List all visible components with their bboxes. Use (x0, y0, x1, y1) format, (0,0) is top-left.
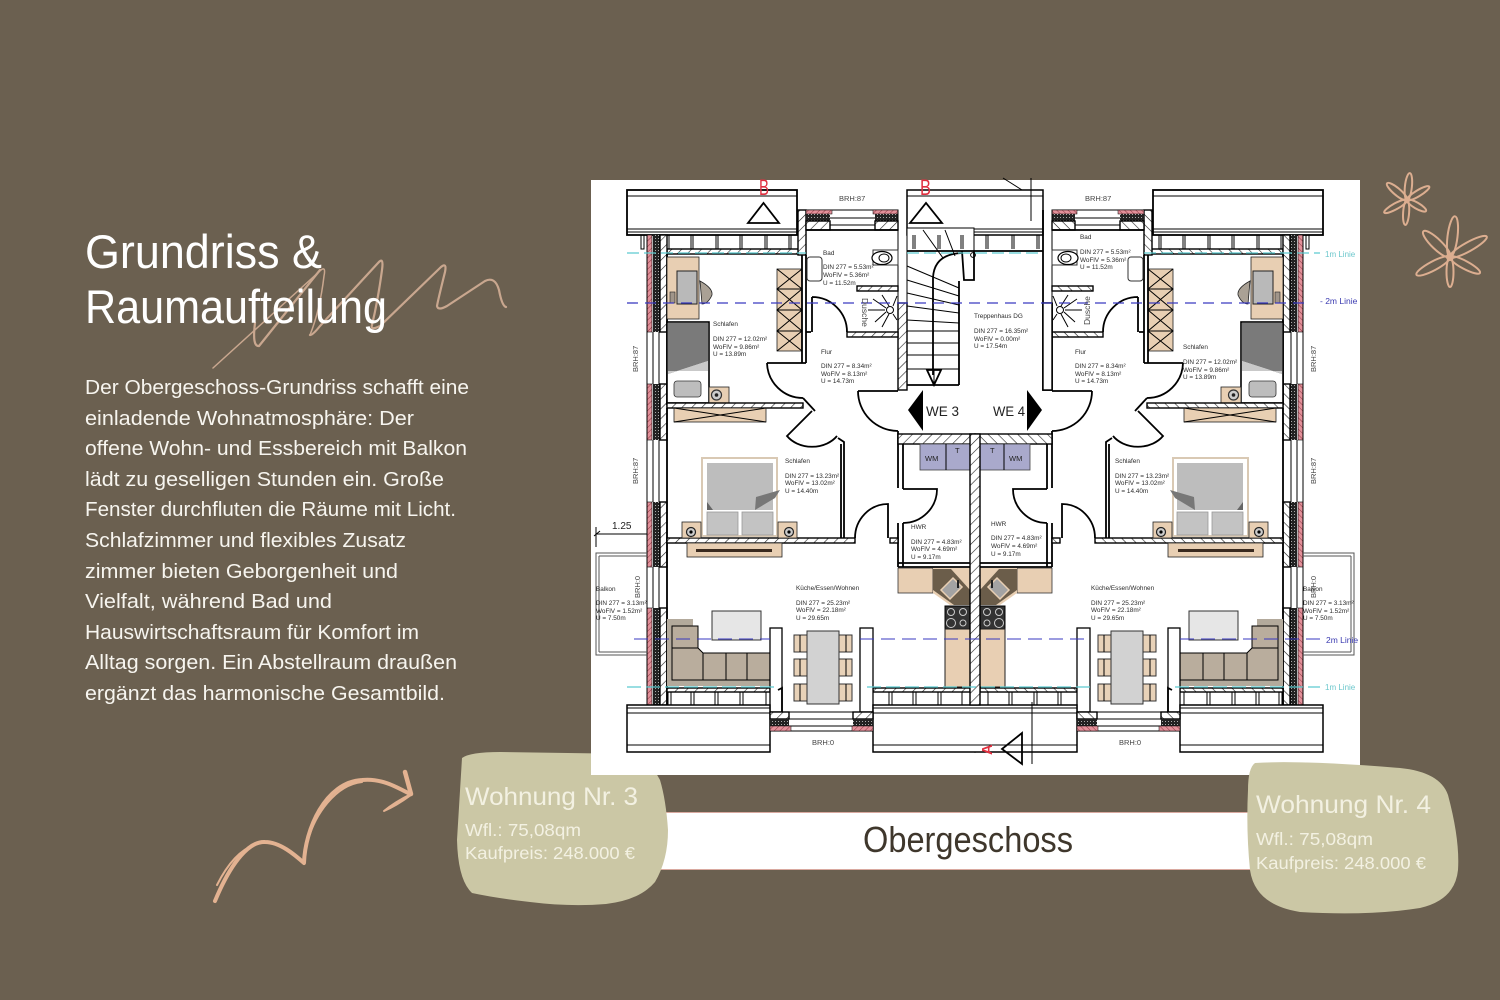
plan annotations: Schlafen (713, 321, 738, 328)
title: Grundriss & (85, 225, 322, 278)
level lines (627, 253, 1322, 687)
icon: hand-drawn arrow (215, 772, 411, 901)
plan annotations: WoFlV = 22.18m² (1091, 607, 1141, 614)
plan annotations: - 2m Linie (1320, 296, 1358, 306)
plan annotations: BRH:87 (631, 458, 640, 484)
plan annotations: U = 7.50m (1303, 615, 1333, 622)
decorative scribble behind title (213, 261, 506, 368)
plan annotations: WoFlV = 8.13m² (821, 371, 867, 378)
plan annotations: DIN 277 = 12.02m² (1183, 359, 1237, 366)
plan annotations: Dusche (1082, 296, 1092, 325)
plan annotations: U = 9.17m (991, 551, 1021, 558)
plan annotations: HWR (991, 521, 1007, 528)
plan annotations: 1m Linie (1325, 683, 1356, 692)
body text: Alltag sorgen. Ein Abstellraum draußen (85, 652, 457, 674)
plan annotations: Balkon (596, 586, 616, 593)
plan annotations: WE 4 (993, 403, 1025, 419)
plan annotations: BRH:87 (631, 346, 640, 372)
plan annotations: WoFlV = 0.00m² (974, 336, 1020, 343)
plan annotations: WoFlV = 13.02m² (785, 480, 835, 487)
icon: small flower (1383, 173, 1431, 225)
callout: Wohnung Nr. 4: Kaufpreis: 248.000 € (1256, 853, 1426, 873)
plan annotations: 1m Linie (1325, 250, 1356, 259)
plan annotations: WoFlV = 22.18m² (796, 607, 846, 614)
plan annotations: Treppenhaus DG (974, 313, 1023, 320)
plan annotations: BRH:0 (633, 576, 642, 598)
plan annotations: T (990, 446, 995, 455)
plan annotations: WoFlV = 4.69m² (991, 543, 1037, 550)
plan annotations: HWR (911, 524, 927, 531)
callout: Wohnung Nr. 4: Wohnung Nr. 4 (1256, 791, 1431, 819)
body text: Der Obergeschoss-Grundriss schafft eine (85, 377, 469, 399)
plan annotations (596, 194, 1358, 747)
plan annotations: DIN 277 = 4.83m² (911, 539, 962, 546)
plan annotations: WoFlV = 8.13m² (1075, 371, 1121, 378)
body text: Vielfalt, während Bad und (85, 591, 332, 613)
plan annotations: Schlafen (1183, 344, 1208, 351)
plan annotations: U = 17.54m (974, 343, 1007, 350)
body text: Hauswirtschaftsraum für Komfort im (85, 622, 419, 644)
plan annotations: DIN 277 = 25.23m² (796, 600, 850, 607)
plan annotations: DIN 277 = 5.53m² (1080, 249, 1131, 256)
callout: Wohnung Nr. 4: Wfl.: 75,08qm (1256, 829, 1373, 849)
body text: einladende Wohnatmosphäre: Der (85, 408, 414, 430)
panel: left blob backing (457, 752, 668, 905)
red section markers: B (920, 175, 931, 200)
plan annotations: DIN 277 = 3.13m² (1303, 600, 1354, 607)
red section markers: B (759, 175, 769, 200)
red section markers: A (979, 744, 996, 755)
plan annotations: T (955, 446, 960, 455)
body text: Schlafzimmer und flexibles Zusatz (85, 530, 406, 552)
plan annotations: BRH:0 (812, 738, 834, 747)
banner: Obergeschoss (655, 812, 1255, 870)
body text: ergänzt das harmonische Gesamtbild. (85, 683, 445, 705)
title: Raumaufteilung (85, 280, 387, 333)
half plan: Wohnung 4 (974, 190, 1354, 752)
plan annotations: U = 11.52m (1080, 264, 1113, 271)
plan annotations: DIN 277 = 3.13m² (596, 600, 647, 607)
plan annotations: DIN 277 = 25.23m² (1091, 600, 1145, 607)
plan annotations: WM (1009, 454, 1022, 463)
plan annotations: 1.25 (612, 521, 632, 532)
plan annotations: DIN 277 = 16.35m² (974, 328, 1028, 335)
central stairwell (594, 178, 1052, 764)
plan annotations: U = 14.73m (1075, 378, 1108, 385)
plan annotations: BRH:87 (1309, 458, 1318, 484)
plan annotations: WoFlV = 1.52m² (1303, 608, 1349, 615)
plan annotations: U = 14.40m (785, 488, 818, 495)
plan annotations: WoFlV = 1.52m² (596, 608, 642, 615)
plan annotations: Bad (823, 250, 835, 257)
half plan: Wohnung 3 (596, 190, 976, 752)
plan annotations: Küche/Essen/Wohnen (1091, 585, 1155, 592)
plan annotations: Flur (1075, 349, 1087, 356)
body text: zimmer bieten Geborgenheit und (85, 561, 398, 583)
plan annotations: U = 7.50m (596, 615, 626, 622)
plan annotations: DIN 277 = 5.53m² (823, 264, 874, 271)
callout: Wohnung Nr. 4 (1247, 762, 1458, 913)
red section markers (759, 175, 996, 755)
plan annotations: Dusche (860, 298, 870, 327)
body text: lädt zu geselligen Stunden ein. Große (85, 469, 444, 491)
plan annotations: WM (925, 454, 938, 463)
body text: Fenster durchfluten die Räume mit Licht. (85, 499, 456, 521)
plan annotations: WoFlV = 9.86m² (713, 344, 759, 351)
plan annotations: U = 14.40m (1115, 488, 1148, 495)
plan annotations: Bad (1080, 234, 1092, 241)
plan annotations: Küche/Essen/Wohnen (796, 585, 860, 592)
callout: Wohnung Nr. 3: Wohnung Nr. 3 (465, 783, 638, 811)
callout: Wohnung Nr. 3 (465, 783, 638, 863)
plan annotations: U = 11.52m (823, 280, 856, 287)
callout: Wohnung Nr. 3: Kaufpreis: 248.000 € (465, 843, 635, 863)
plan annotations: DIN 277 = 13.23m² (785, 473, 839, 480)
plan annotations: WoFlV = 5.36m² (1080, 257, 1126, 264)
plan annotations: BRH:87 (1309, 346, 1318, 372)
plan annotations: U = 14.73m (821, 378, 854, 385)
plan annotations: BRH:0 (1309, 576, 1318, 598)
plan annotations: BRH:0 (1119, 738, 1141, 747)
plan annotations: 2m Linie (1326, 635, 1358, 645)
plan annotations: Balkon (1303, 586, 1323, 593)
plan annotations: U = 9.17m (911, 554, 941, 561)
plan annotations: DIN 277 = 4.83m² (991, 535, 1042, 542)
plan annotations: U = 13.89m (713, 351, 746, 358)
plan annotations: DIN 277 = 8.34m² (821, 363, 872, 370)
title (85, 225, 387, 333)
plan annotations: WoFlV = 5.36m² (823, 272, 869, 279)
plan annotations: U = 29.65m (796, 615, 829, 622)
plan annotations: WoFlV = 4.69m² (911, 546, 957, 553)
plan annotations: BRH:87 (839, 194, 865, 203)
plan annotations: Flur (821, 349, 833, 356)
body text (85, 377, 469, 705)
plan annotations: DIN 277 = 13.23m² (1115, 473, 1169, 480)
plan annotations: Schlafen (785, 458, 810, 465)
plan annotations: U = 29.65m (1091, 615, 1124, 622)
plan annotations: DIN 277 = 8.34m² (1075, 363, 1126, 370)
plan annotations: WE 3 (926, 403, 959, 419)
callout: Wohnung Nr. 3: Wfl.: 75,08qm (465, 820, 581, 840)
icon: large flower (1414, 216, 1489, 287)
banner: Obergeschoss: Obergeschoss (863, 819, 1073, 860)
plan annotations: U = 13.89m (1183, 374, 1216, 381)
panel: floor plan sheet (591, 175, 1360, 775)
plan annotations: Schlafen (1115, 458, 1140, 465)
plan annotations: WoFlV = 9.86m² (1183, 367, 1229, 374)
plan annotations: BRH:87 (1085, 194, 1111, 203)
plan annotations: DIN 277 = 12.02m² (713, 336, 767, 343)
plan annotations: WoFlV = 13.02m² (1115, 480, 1165, 487)
body text: offene Wohn- und Essbereich mit Balkon (85, 438, 467, 460)
